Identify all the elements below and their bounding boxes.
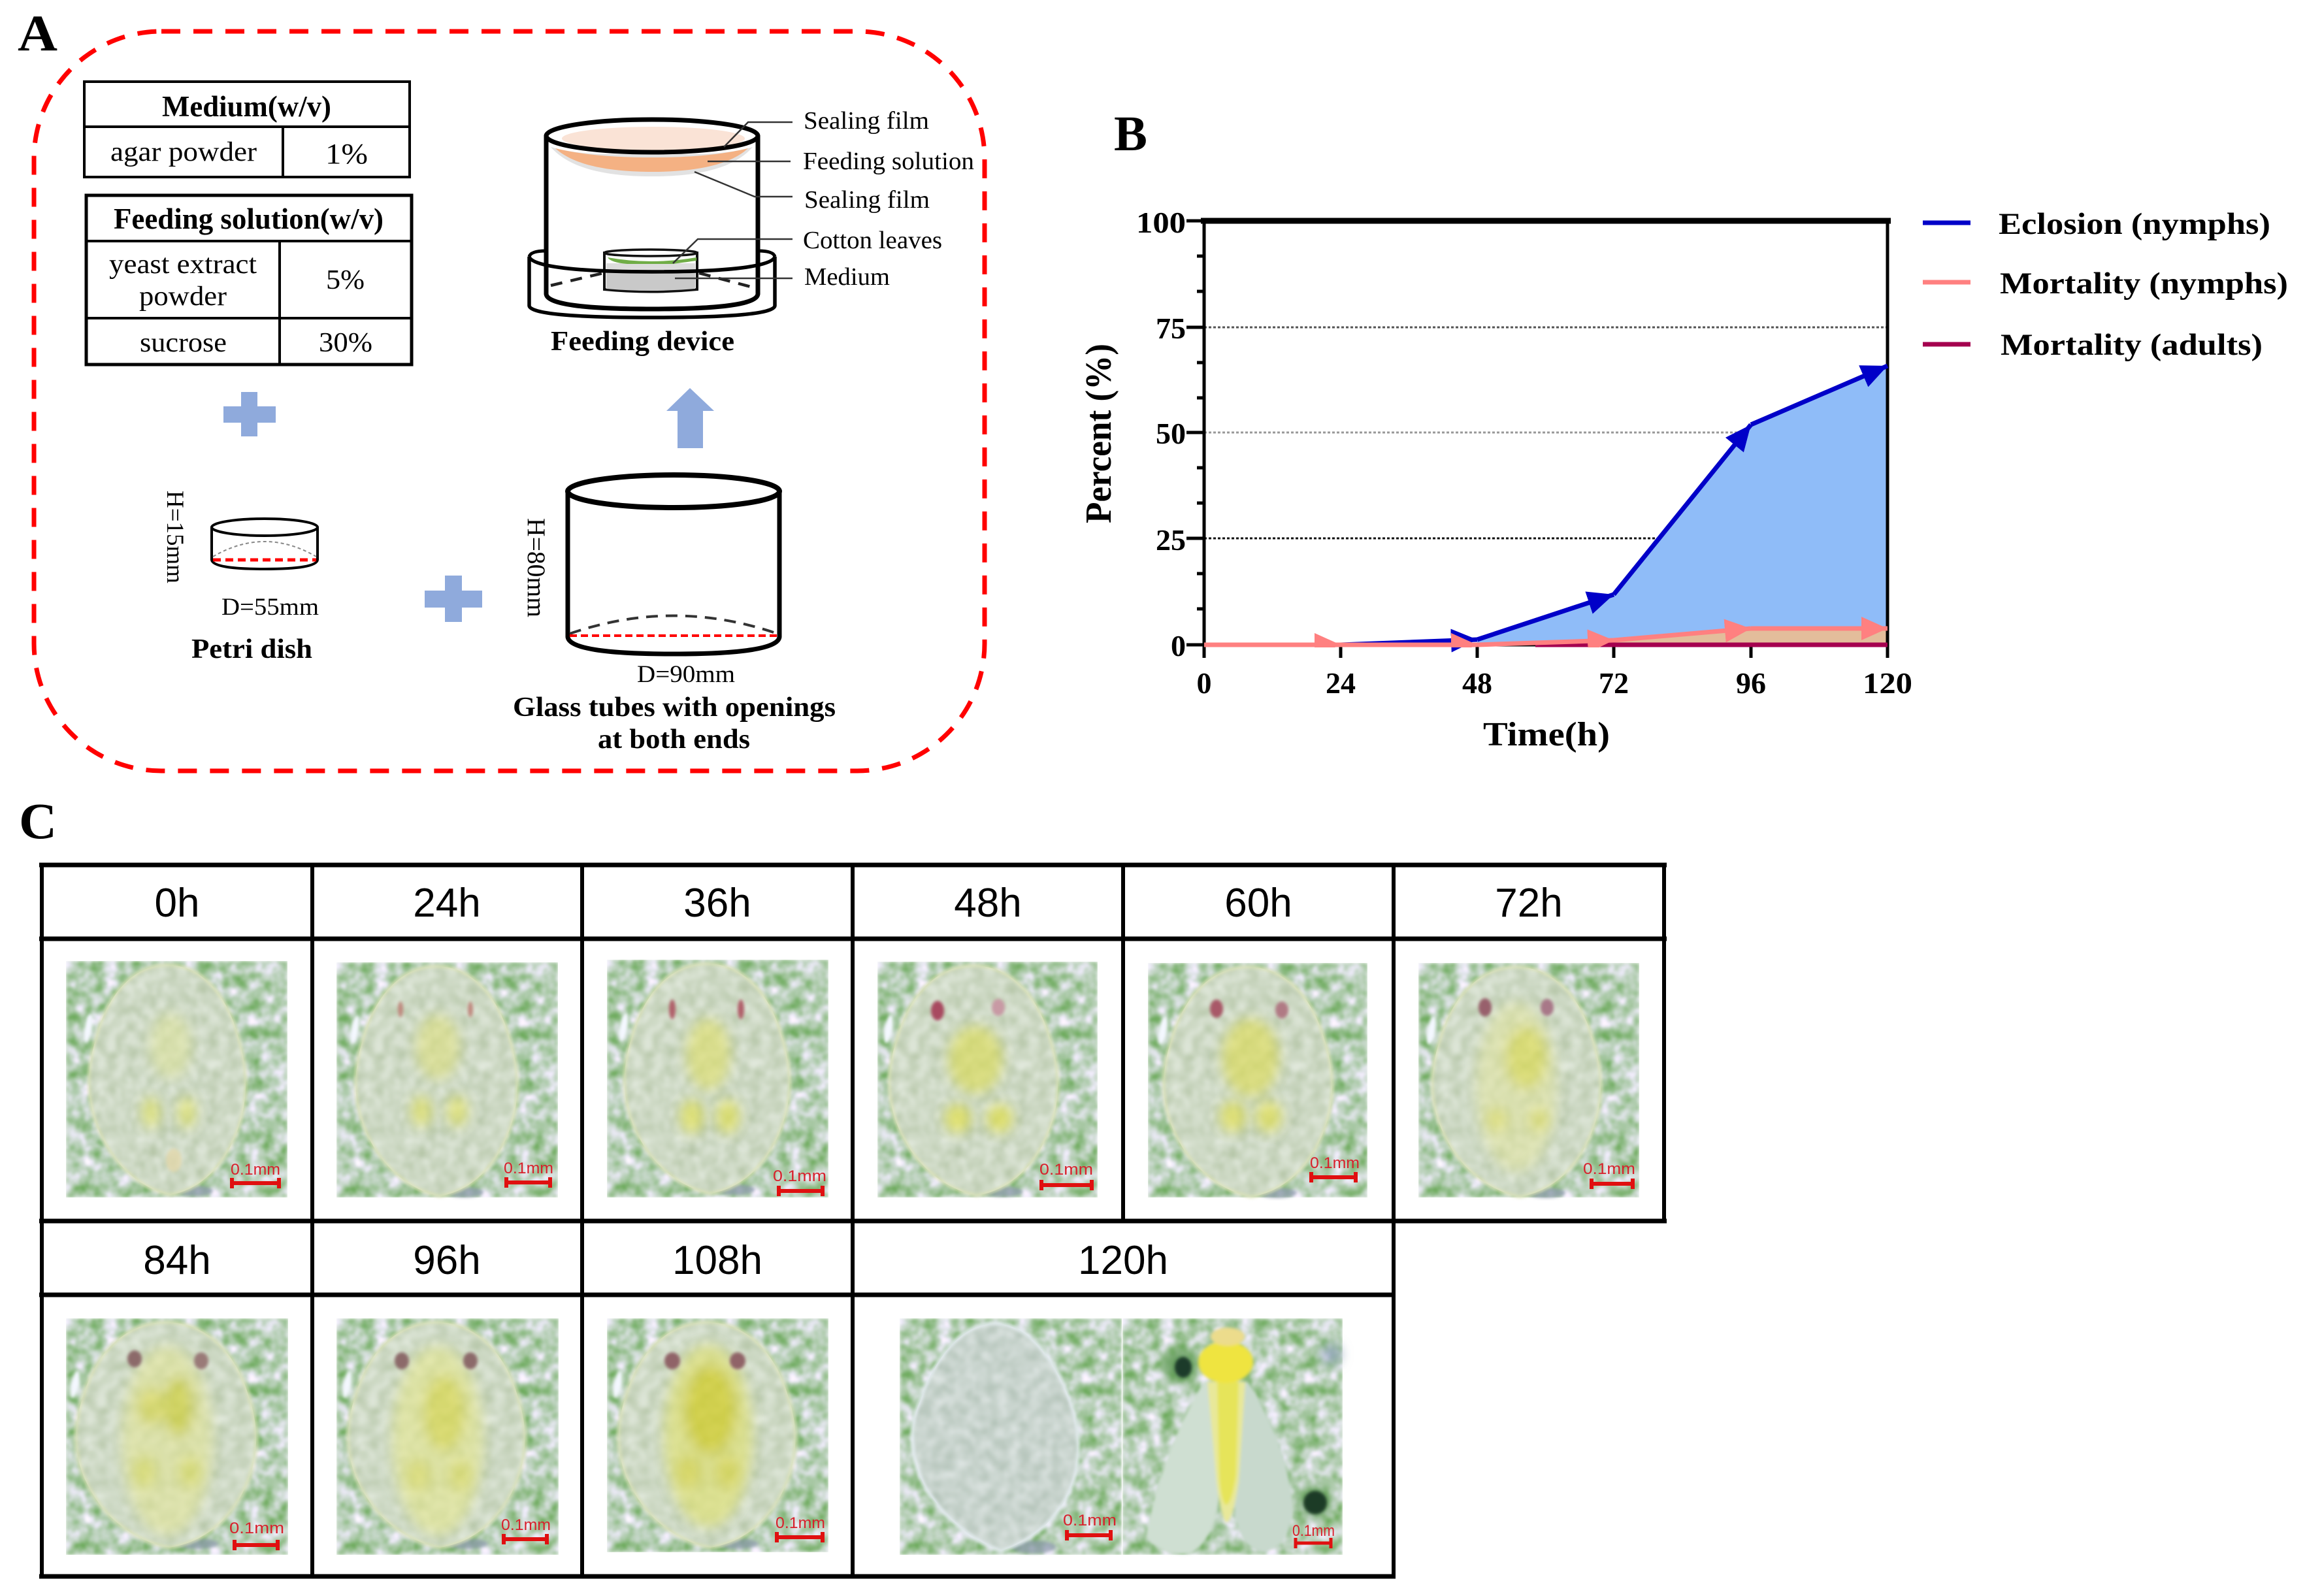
photo: nymph 96h: 0.1mm	[501, 1516, 551, 1534]
photo: nymph 72h: 0.1mm	[1583, 1160, 1635, 1178]
label: sealing film top: Sealing film	[804, 107, 929, 135]
photo: nymph 96h	[336, 1318, 559, 1555]
photo: nymph 36h: 0.1mm	[773, 1167, 826, 1185]
x axis tick labels: 0	[1197, 666, 1211, 700]
photo: nymph 0h: 0.1mm	[231, 1161, 280, 1179]
illustration: petri dish	[212, 519, 318, 569]
label: tube height: H=80mm	[522, 518, 550, 617]
x axis tick labels: 48	[1462, 666, 1492, 700]
y axis title: Percent (%)	[1079, 344, 1119, 523]
time labels, second row: 84h	[143, 1238, 211, 1283]
photo: nymph 48h: 0.1mm	[1039, 1161, 1093, 1179]
y axis tick labels: 25	[1156, 523, 1186, 557]
photo: nymph 108h	[607, 1318, 828, 1552]
time labels, second row	[143, 1238, 1168, 1283]
label: medium: Medium	[804, 263, 890, 291]
y axis tick labels: 75	[1156, 312, 1186, 345]
table: feeding solution composition: sucrose	[140, 328, 227, 358]
time labels, first row: 0h	[155, 881, 199, 926]
icon: plus between tables and petri dish	[223, 392, 276, 436]
label: tube diameter: D=90mm	[637, 661, 735, 688]
x axis tick labels: 72	[1599, 666, 1629, 700]
photo: nymph 60h: 0.1mm	[1310, 1154, 1360, 1172]
table: feeding solution composition: 30%	[319, 328, 372, 358]
time labels, first row: 72h	[1495, 881, 1563, 926]
line: eclosion	[1341, 366, 1888, 645]
legend: Mortality (adults)	[2001, 328, 2263, 362]
photo: nymph 0h	[66, 961, 287, 1197]
axes	[1204, 221, 1888, 658]
photo: nymph 48h	[877, 962, 1098, 1197]
photo: adult whitefly 120h	[1122, 1318, 1343, 1555]
time labels, first row: 24h	[413, 881, 481, 926]
table: medium composition	[84, 82, 410, 177]
time labels, second row: 120h	[1078, 1238, 1168, 1283]
panel A: dashed red frame	[34, 31, 985, 771]
photo: nymph 84h	[66, 1318, 288, 1555]
photo: nymph 84h: 0.1mm	[229, 1520, 284, 1537]
table: feeding solution composition	[86, 195, 412, 365]
label: cotton leaves: Cotton leaves	[803, 227, 942, 254]
time labels, first row: 36h	[683, 881, 751, 926]
caption: petri dish: Petri dish	[191, 634, 312, 664]
panel letter B: B	[1114, 106, 1147, 161]
x axis title: Time(h)	[1483, 716, 1610, 753]
arrow: tube to feeding device	[666, 388, 714, 448]
x axis tick labels	[1197, 666, 1912, 700]
x axis tick labels: 96	[1736, 666, 1766, 700]
label: petri dish height: H=15mm	[161, 491, 188, 583]
panel C: time-series table grid	[39, 863, 1667, 1578]
photo: empty exuvia 120h	[900, 1318, 1122, 1555]
line: nymph mortality	[1204, 628, 1888, 645]
illustration: feeding device	[529, 120, 793, 318]
panel letter A: A	[18, 5, 57, 61]
table: feeding solution composition: yeast extract	[109, 250, 257, 280]
area: eclosion	[1477, 366, 1888, 645]
area: nymph mortality	[1477, 628, 1888, 645]
illustration: glass tube	[568, 475, 779, 654]
y axis tick labels: 100	[1136, 206, 1186, 239]
table: feeding solution composition: Feeding solution(w/v)	[114, 203, 384, 235]
label: feeding solution: Feeding solution	[803, 148, 974, 175]
time labels, first row	[155, 881, 1563, 926]
photo: nymph 24h	[336, 962, 558, 1197]
photo: nymph 36h	[607, 960, 828, 1197]
caption: feeding device: Feeding device	[551, 327, 734, 357]
time labels, first row: 60h	[1224, 881, 1292, 926]
panel letter C: C	[19, 792, 57, 849]
table: medium composition: agar powder	[110, 137, 257, 167]
photo: nymph 72h	[1418, 963, 1639, 1198]
y axis tick labels: 50	[1156, 417, 1186, 450]
caption: glass tubes line 2: at both ends	[598, 725, 750, 755]
label: petri dish diameter: D=55mm	[221, 594, 319, 621]
time labels, first row: 48h	[954, 881, 1022, 926]
photo: empty exuvia 120h: 0.1mm	[1063, 1512, 1117, 1529]
photo: nymph 108h: 0.1mm	[776, 1514, 825, 1532]
legend: Eclosion (nymphs)	[1999, 207, 2270, 241]
caption: glass tubes line 1: Glass tubes with openings	[513, 692, 836, 723]
label: sealing film bottom: Sealing film	[804, 186, 930, 214]
photo: nymph 60h	[1148, 963, 1367, 1198]
legend: Mortality (nymphs)	[2000, 267, 2288, 301]
icon: plus between petri dish and tube	[425, 576, 482, 622]
x axis tick labels: 120	[1863, 666, 1912, 700]
table: medium composition: Medium(w/v)	[162, 90, 331, 123]
chart: eclosion and mortality over time	[1186, 221, 1891, 658]
table: feeding solution composition: powder	[139, 282, 227, 312]
x axis tick labels: 24	[1326, 666, 1356, 700]
table: medium composition: 1%	[325, 138, 368, 170]
table: feeding solution composition: 5%	[326, 265, 365, 295]
legend	[1923, 207, 2288, 362]
line: adult mortality	[1535, 643, 1888, 647]
time labels, second row: 108h	[672, 1238, 762, 1283]
y axis tick labels: 0	[1171, 629, 1186, 662]
photo: adult whitefly 120h: 0.1mm	[1292, 1522, 1335, 1540]
photo: nymph 24h: 0.1mm	[504, 1160, 553, 1177]
y axis tick labels	[1136, 206, 1186, 662]
time labels, second row: 96h	[413, 1238, 481, 1283]
